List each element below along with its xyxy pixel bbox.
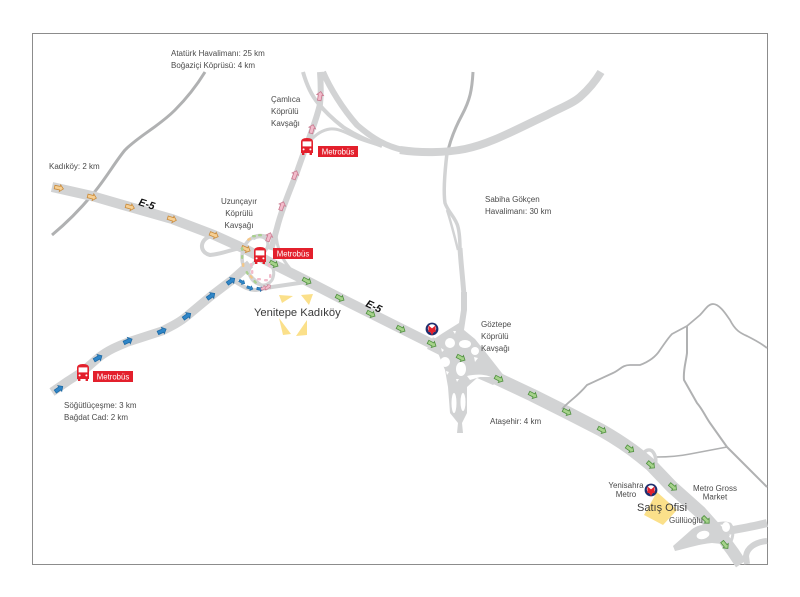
road: ring north <box>271 72 321 250</box>
label: Güllüoğlu: Güllüoğlu <box>669 516 703 525</box>
road: E-5 end <box>722 537 741 564</box>
label: Metrobüs centre: Metrobüs <box>277 250 309 258</box>
road: Çamlıca left ramp <box>303 72 382 146</box>
road network <box>52 72 767 564</box>
road: Ataşehir upper line <box>562 304 767 409</box>
pink traffic arrows <box>260 91 324 291</box>
road: Çamlıca upper curve <box>323 72 403 150</box>
label: Çamlıca junction: Köprülü <box>271 107 299 116</box>
label: Göztepe junction: Göztepe <box>481 320 512 329</box>
road: east right arm <box>722 523 767 532</box>
green traffic arrows <box>268 259 730 551</box>
label: Yenisahra Metro: Yenisahra <box>608 481 644 490</box>
road: Uzunçayır side ramp <box>202 236 240 255</box>
road: main curve east <box>400 72 601 152</box>
label: Yenitepe Kadıköy: Yenitepe Kadıköy <box>254 307 341 319</box>
road: east lower curve <box>746 541 767 564</box>
label: Sabiha Gökçen distance <box>485 195 552 216</box>
label: Çamlıca junction: Çamlıca <box>271 95 301 104</box>
label: Atatürk and Boğaziçi distances <box>171 49 265 70</box>
road: Sabiha Gökçen dark section <box>447 72 473 155</box>
label: Söğütlüçeşme and Bağdat distances: Bağdat Cad: 2 km <box>64 413 128 422</box>
road: Çamlıca lower ramp <box>310 129 382 146</box>
label: Göztepe junction: Kavşağı <box>481 344 510 353</box>
label: Uzunçayır junction <box>221 197 257 230</box>
label: Uzunçayır junction: Uzunçayır <box>221 197 257 206</box>
road: south link <box>232 280 306 290</box>
road: Sabiha Gökçen south section <box>444 153 460 250</box>
interchange: east upper ring <box>704 523 733 546</box>
road: Uzunçayır upper ring <box>249 237 274 285</box>
label: Söğütlüçeşme and Bağdat distances: Söğütlüçeşme: 3 km <box>64 401 137 410</box>
label: Yenisahra Metro <box>608 481 644 499</box>
label: Metrobüs north: Metrobüs <box>322 148 354 156</box>
label: Göztepe junction: Köprülü <box>481 332 509 341</box>
icon: metrobüs south-west <box>77 364 89 381</box>
icon: metrobüs north <box>301 138 313 155</box>
label: E-5 east: E-5 <box>364 298 384 316</box>
label: Söğütlüçeşme and Bağdat distances <box>64 401 137 422</box>
label: E-5 west: E-5 <box>137 196 156 213</box>
interchange: east end <box>673 522 743 552</box>
road: Göztepe feed <box>460 248 464 296</box>
label: Kadıköy distance: Kadıköy: 2 km <box>49 162 100 171</box>
label: Metrobüs centre <box>273 248 313 259</box>
label: Ataşehir distance: Ataşehir: 4 km <box>490 417 541 426</box>
label: Metrobüs south-west: Metrobüs <box>97 372 129 382</box>
label: Çamlıca junction <box>271 95 301 128</box>
label: Satış Ofisi: Satış Ofisi <box>637 502 687 514</box>
road: Uzunçayır east ramp <box>276 232 306 283</box>
icon: metrobüs centre <box>254 247 266 264</box>
road: Uzunçayır outer ring <box>242 236 268 285</box>
label: Metro Gross Market <box>693 484 737 502</box>
label: Metrobüs south-west <box>93 371 133 382</box>
label: Çamlıca junction: Kavşağı <box>271 119 300 128</box>
icon: metro Göztepe <box>426 323 438 335</box>
Yenitepe location marker <box>279 294 313 336</box>
interchange: small loop <box>643 450 656 468</box>
label: Uzunçayır junction: Kavşağı <box>225 221 253 230</box>
road: Ataşehir connector <box>657 447 727 457</box>
label: Atatürk and Boğaziçi distances: Atatürk Havalimanı: 25 km <box>171 49 265 58</box>
road: SW branch <box>52 264 250 392</box>
label: Metrobüs north <box>318 146 358 157</box>
road: E-5 east section <box>430 343 725 540</box>
label: Yenisahra Metro: Metro <box>616 490 637 499</box>
label: Metro Gross Market: Metro Gross <box>693 484 737 493</box>
road: Atatürk line <box>52 72 205 235</box>
label: Sabiha Gökçen distance: Sabiha Gökçen <box>485 195 540 204</box>
label: Metro Gross Market: Market <box>703 492 728 502</box>
orange traffic arrows <box>54 184 252 254</box>
icon: metro Yenisahra <box>645 484 657 496</box>
label: Göztepe junction <box>481 320 512 353</box>
label: Sabiha Gökçen distance: Havalimanı: 30 km <box>485 207 552 216</box>
road: Ataşehir central line <box>684 326 767 487</box>
interchange: Göztepe <box>425 292 505 433</box>
label: Atatürk and Boğaziçi distances: Boğaziçi Köprüsü: 4 km <box>171 61 255 70</box>
blue traffic arrows <box>53 276 264 394</box>
Satış Ofisi marker <box>644 492 677 525</box>
loop traffic arrows <box>241 234 271 284</box>
road: Sabiha Gökçen split lane <box>447 210 458 250</box>
road: E-5 motorway <box>52 187 432 344</box>
label: Uzunçayır junction: Köprülü <box>225 209 253 218</box>
